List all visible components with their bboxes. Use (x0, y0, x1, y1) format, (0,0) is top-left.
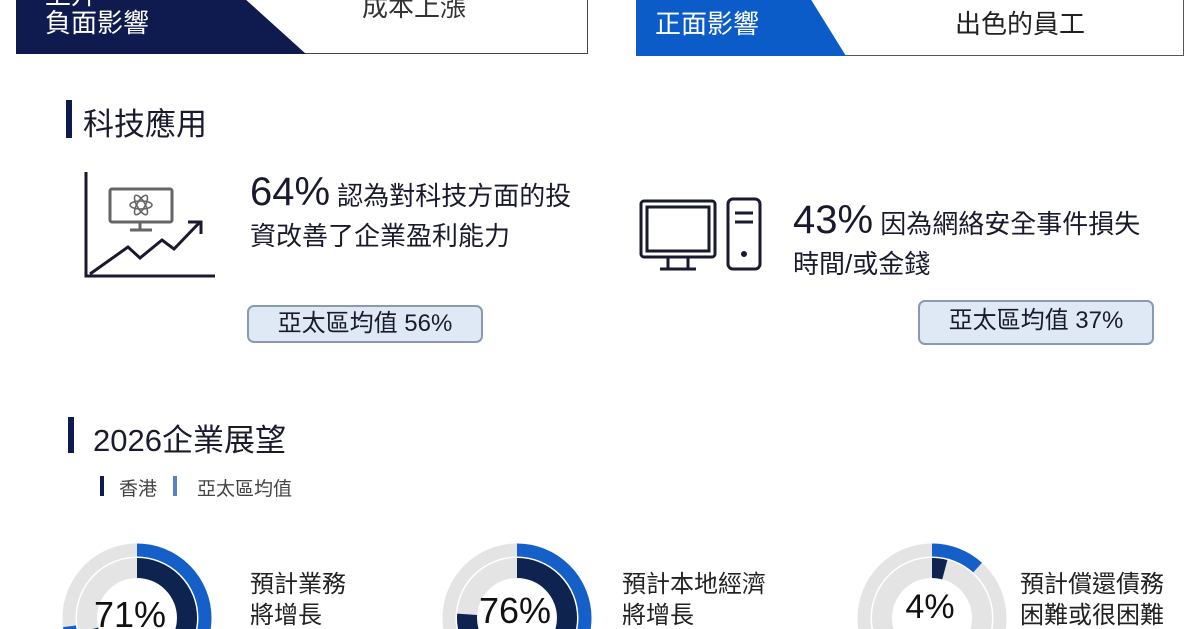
label: debt difficulty (1020, 571, 1164, 629)
legend: 亞太區均值 (197, 479, 292, 500)
legend (100, 476, 292, 500)
heading: outlook: 2026企業展望 (93, 423, 286, 458)
label: local economy: 將增長 (622, 602, 694, 629)
text: excellent staff: 出色的員工 (955, 9, 1085, 39)
icon: computer (640, 198, 762, 270)
label: business growth (250, 571, 346, 629)
icon: growth chart with monitor (84, 172, 215, 278)
label: local economy (622, 571, 766, 629)
label: debt difficulty: 困難或很困難 (1020, 602, 1164, 629)
label: business growth: 預計業務 (250, 571, 346, 598)
box: APAC 37% (918, 300, 1154, 345)
donut: debt difficulty 4% (858, 544, 1006, 629)
stat: 64% (250, 170, 571, 251)
label: local economy: 預計本地經濟 (622, 571, 766, 598)
stat: 43%: 時間/或金錢 (793, 249, 930, 279)
label: negative: 負面影響 (45, 8, 149, 38)
heading: tech: 科技應用 (83, 107, 207, 142)
banner: negative impact (16, 0, 588, 54)
box: APAC 37%: 亞太區均值 37% (949, 307, 1123, 334)
stat: 43%: 43% 因為網絡安全事件損失 (793, 198, 1140, 242)
banner: positive impact (636, 0, 1184, 56)
label: business growth: 將增長 (250, 602, 322, 629)
box: APAC 56% (247, 305, 483, 343)
label: positive: 正面影響 (655, 9, 759, 39)
label: debt difficulty: 預計償還債務 (1020, 571, 1164, 598)
stat: 64%: 64% 認為對科技方面的投 (250, 170, 571, 214)
donut: business growth 71% (62, 544, 212, 629)
legend: 香港 (119, 479, 157, 500)
stat: 64%: 資改善了企業盈利能力 (250, 221, 510, 251)
stat: 43% (793, 198, 1140, 279)
donut: debt difficulty 4%: 4% (905, 588, 955, 626)
donut: local economy 76% (442, 544, 592, 629)
box: APAC 56%: 亞太區均值 56% (278, 310, 452, 337)
